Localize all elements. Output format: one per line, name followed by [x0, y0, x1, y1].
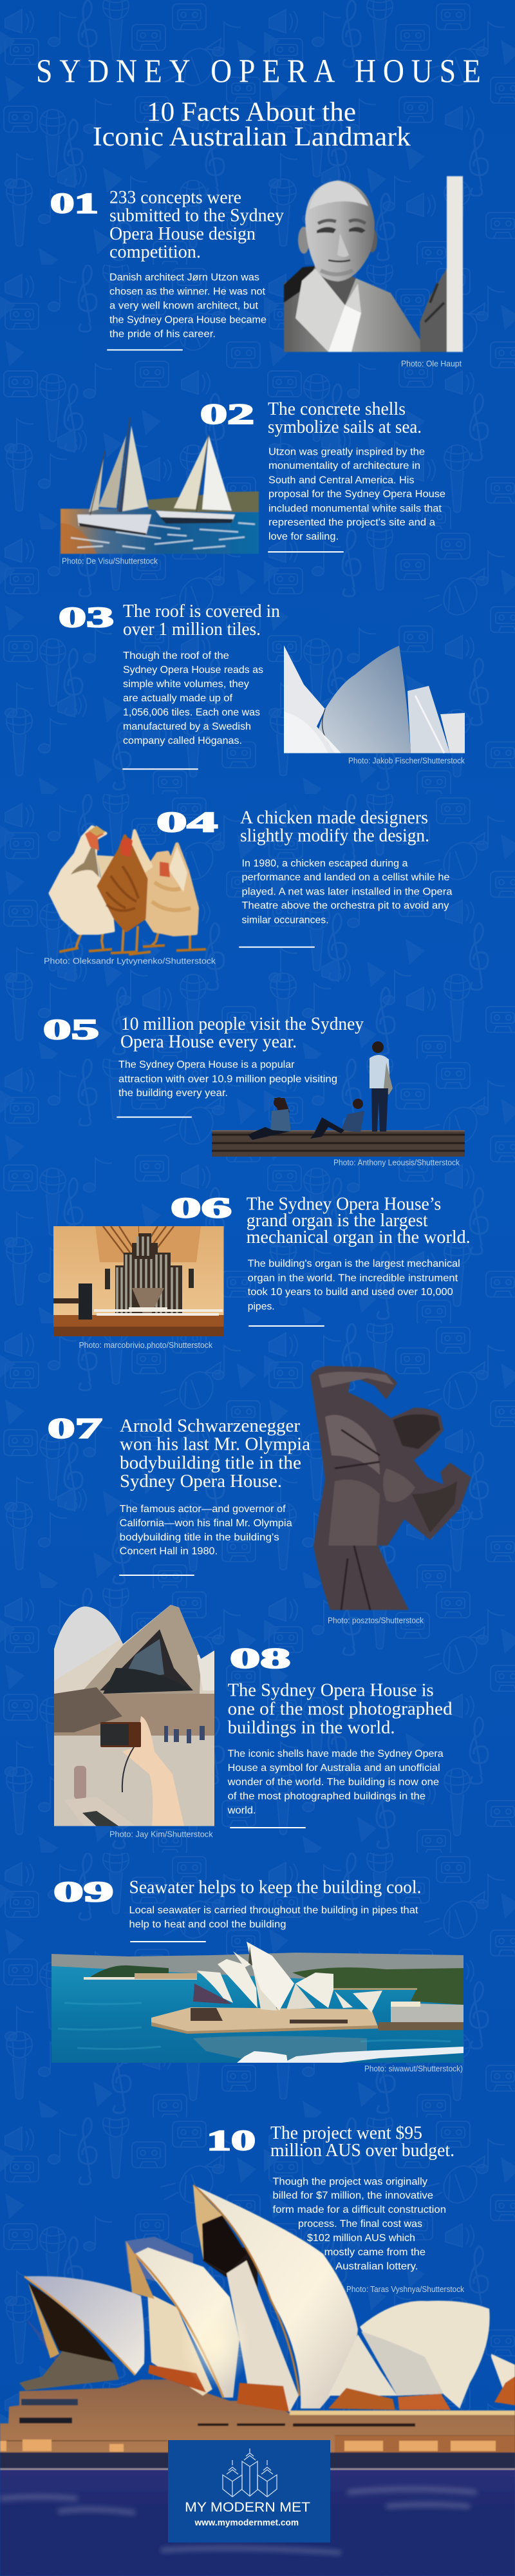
body text 06: took 10 years to build and used over 10,000: [248, 1287, 453, 1298]
heading 10: million AUS over budget.: [270, 2141, 454, 2161]
number 10: 10: [207, 2125, 256, 2156]
body text 01: a very well known architect, but: [109, 300, 259, 312]
photo: camera in front of opera house: [54, 1604, 214, 1829]
heading 01: Opera House design: [109, 224, 256, 244]
heading 08: The Sydney Opera House is: [228, 1680, 434, 1700]
body text 03: Though the roof of the: [123, 650, 229, 661]
panel: fact 09: [52, 1876, 464, 2074]
body text 01: chosen as the winner. He was not: [109, 286, 266, 297]
divider 07: [120, 1575, 194, 1576]
number 09: 09: [53, 1876, 113, 1908]
divider 02: [268, 551, 343, 553]
heading 09: Seawater helps to keep the building cool.: [129, 1878, 421, 1898]
body text 09: help to heat and cool the building: [129, 1919, 286, 1930]
heading 08: [228, 1680, 453, 1738]
body text 04: similar occurances.: [242, 914, 328, 925]
body text 03: simple white volumes, they: [123, 679, 249, 690]
number 01: 01: [50, 187, 98, 219]
body text 03: are actually made up of: [123, 693, 233, 704]
caption 04: Photo: Oleksandr Lytvynenko/Shutterstock: [44, 956, 216, 966]
heading 05: 10 million people visit the Sydney: [121, 1014, 364, 1034]
caption 02: Photo: De Visu/Shutterstock: [62, 556, 158, 565]
photo: roof shells: [284, 645, 465, 753]
body text 07: The famous actor—and governor of: [120, 1504, 286, 1515]
heading 03: The roof is covered in: [123, 601, 280, 621]
body text 08: [227, 1748, 444, 1816]
body text 06: organ in the world. The incredible instrument: [248, 1273, 458, 1283]
heading 04: A chicken made designers: [240, 808, 428, 828]
number 08: 08: [230, 1642, 291, 1674]
body text 05: the building every year.: [118, 1088, 228, 1099]
body text 04: performance and landed on a cellist while he: [242, 872, 450, 883]
body text 10: form made for a difficult construction: [273, 2204, 446, 2215]
body text 06: The building's organ is the largest mechanical: [248, 1258, 460, 1269]
panel: fact 02: [61, 398, 445, 565]
heading 03: over 1 million tiles.: [123, 620, 261, 639]
panel: fact 05: [43, 1014, 465, 1168]
divider 09: [131, 1941, 205, 1942]
panel: fact 07: [48, 1366, 471, 1625]
subtitle: [93, 98, 411, 152]
body text 10: [273, 2177, 446, 2272]
body text 10: Australian lottery.: [335, 2261, 418, 2272]
heading 05: [120, 1014, 364, 1052]
logo panel: My Modern Met: [168, 2440, 330, 2543]
divider 08: [230, 1827, 305, 1828]
heading 05: Opera House every year.: [120, 1032, 297, 1052]
heading 06: The Sydney Opera House’s: [247, 1194, 441, 1215]
panel: fact 06: [53, 1192, 471, 1350]
body text 02: Utzon was greatly inspired by the: [268, 446, 425, 457]
body text 10: mostly came from the: [324, 2247, 426, 2258]
body text 02: monumentality of architecture in: [268, 460, 420, 471]
heading 08: buildings in the world.: [228, 1718, 395, 1738]
body text 08: world.: [227, 1805, 256, 1816]
panel: fact 04: [44, 806, 453, 966]
body text 02: [268, 446, 445, 542]
heading 10: The project went $95: [270, 2123, 422, 2143]
divider 05: [117, 1117, 191, 1118]
body text 08: House a symbol for Australia and an unofficial: [228, 1763, 440, 1774]
number 02: 02: [200, 398, 254, 430]
heading 07: won his last Mr. Olympia: [120, 1435, 311, 1455]
photo: Jørn Utzon portrait: [284, 176, 463, 352]
body text 08: The iconic shells have made the Sydney Opera: [228, 1748, 444, 1759]
body text 01: [109, 272, 267, 340]
panel: fact 03: [59, 601, 465, 769]
body text 01: the Sydney Opera House became: [109, 314, 267, 325]
body text 05: attraction with over 10.9 million people visiting: [118, 1074, 337, 1084]
subtitle: 10 Facts About the: [147, 98, 356, 128]
body text 03: [123, 650, 263, 746]
heading 01: 233 concepts were: [109, 188, 241, 208]
body text 03: 1,056,006 tiles. Each one was: [123, 707, 260, 718]
heading 02: The concrete shells: [268, 399, 406, 419]
caption 01: Photo: Ole Haupt: [401, 359, 462, 368]
brand name: MY MODERN MET: [185, 2500, 310, 2515]
photo: visitors on steps: [212, 1041, 465, 1157]
caption 08: Photo: Jay Kim/Shutterstock: [109, 1830, 213, 1839]
body text 08: wonder of the world. The building is now one: [227, 1777, 439, 1788]
body text 02: proposal for the Sydney Opera House: [268, 489, 445, 500]
photo: harbour view of opera house: [52, 1942, 464, 2063]
body text 07: bodybuilding title in the building's: [120, 1532, 279, 1543]
body text 06: pipes.: [248, 1301, 275, 1312]
photo: bodybuilder statue: [310, 1366, 471, 1610]
divider 06: [249, 1325, 324, 1327]
caption 10: Photo: Taras Vyshnya/Shutterstock: [346, 2284, 464, 2294]
heading 06: [247, 1194, 471, 1247]
body text 07: Concert Hall in 1980.: [120, 1546, 218, 1557]
body text 10: process. The final cost was: [298, 2219, 422, 2230]
body text 05: The Sydney Opera House is a popular: [118, 1059, 295, 1070]
heading 03: [123, 601, 280, 639]
heading 02: symbolize sails at sea.: [268, 417, 422, 437]
caption 03: Photo: Jakob Fischer/Shutterstock: [348, 756, 465, 765]
body text 03: company called Höganas.: [123, 735, 242, 746]
number 04: 04: [156, 806, 218, 838]
panel: fact 10: [0, 2123, 515, 2576]
body text 02: love for sailing.: [268, 531, 339, 542]
body text 07: [120, 1504, 292, 1557]
body text 04: In 1980, a chicken escaped during a: [242, 858, 408, 869]
body text 09: Local seawater is carried throughout the building in pipes that: [129, 1905, 418, 1916]
panel: fact 01: [50, 176, 463, 368]
subtitle: Iconic Australian Landmark: [93, 122, 411, 152]
caption 09: Photo: siwawut/Shutterstock): [364, 2064, 463, 2074]
body text 08: of the most photographed buildings in the: [228, 1791, 426, 1802]
heading 01: competition.: [109, 242, 201, 262]
body text 03: manufactured by a Swedish: [123, 721, 251, 732]
heading 04: slightly modify the design.: [240, 826, 429, 846]
body text 02: South and Central America. His: [268, 475, 415, 486]
body text 05: [118, 1059, 337, 1099]
body text 04: Theatre above the orchestra pit to avoid any: [242, 900, 449, 911]
heading 01: submitted to the Sydney: [109, 206, 284, 226]
number 03: 03: [59, 601, 114, 633]
heading 07: Sydney Opera House.: [120, 1472, 282, 1492]
body text 01: the pride of his career.: [109, 328, 216, 340]
body text 01: Danish architect Jørn Utzon was: [109, 272, 259, 283]
number 05: 05: [43, 1014, 99, 1045]
heading 07: Arnold Schwarzenegger: [120, 1416, 301, 1436]
photo: grand organ: [53, 1226, 224, 1336]
panel: fact 08: [54, 1604, 453, 1839]
photo: three chickens: [50, 826, 206, 954]
body text 10: Though the project was originally: [273, 2177, 427, 2188]
heading 01: [109, 188, 284, 262]
caption 07: Photo: posztos/Shutterstock: [328, 1615, 424, 1625]
body text 06: [248, 1258, 460, 1312]
photo: sailboats: [61, 417, 259, 554]
divider 01: [108, 349, 182, 350]
body text 04: [242, 858, 453, 925]
heading 02: [268, 399, 422, 437]
body text 02: included monumental white sails that: [268, 503, 442, 514]
title: SYDNEY OPERA HOUSE: [36, 52, 481, 90]
body text 04: played. A net was later installed in the Opera: [242, 886, 453, 897]
heading 07: [120, 1416, 311, 1492]
heading 10: [270, 2123, 454, 2161]
heading 06: grand organ is the largest: [247, 1211, 428, 1231]
body text 10: $102 million AUS which: [307, 2233, 415, 2244]
icon: three towers logo: [223, 2448, 277, 2497]
body text 09: [129, 1905, 418, 1930]
body text 03: Sydney Opera House reads as: [123, 665, 263, 676]
divider 04: [239, 947, 314, 948]
heading 07: bodybuilding title in the: [120, 1453, 301, 1473]
number 06: 06: [171, 1192, 232, 1224]
heading 06: mechanical organ in the world.: [247, 1227, 471, 1247]
caption 05: Photo: Anthony Leousis/Shutterstock: [333, 1158, 460, 1168]
photo: opera house at dusk: [0, 2185, 515, 2576]
body text 10: billed for $7 million, the innovative: [273, 2190, 433, 2201]
body text 07: California—won his final Mr. Olympia: [120, 1518, 292, 1529]
body text 02: represented the project's site and a: [268, 517, 435, 528]
divider 03: [123, 768, 198, 770]
heading 08: one of the most photographed: [228, 1699, 453, 1719]
caption 06: Photo: marcobrivio.photo/Shutterstock: [79, 1340, 212, 1350]
number 07: 07: [48, 1413, 102, 1444]
heading 04: [240, 808, 429, 846]
website: www.mymodernmet.com: [194, 2517, 299, 2528]
